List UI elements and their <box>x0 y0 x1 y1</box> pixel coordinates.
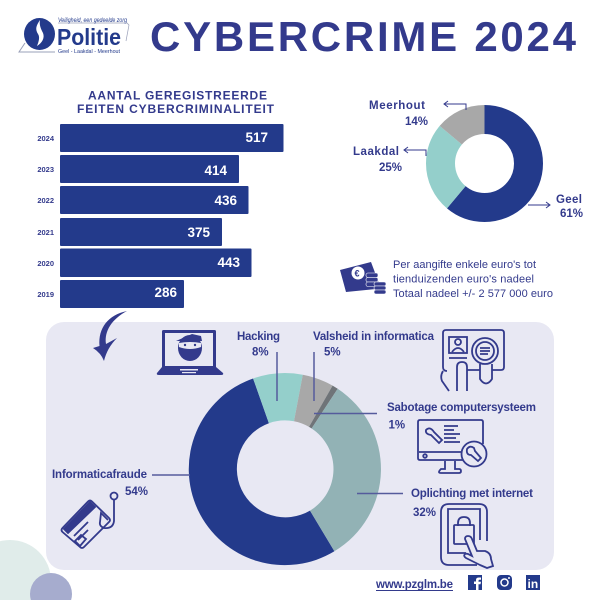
donut chart: municipalities <box>440 120 528 208</box>
icon: document inspection <box>441 330 504 391</box>
label: Laakdal <box>353 146 426 174</box>
bar chart: 443 <box>217 255 240 270</box>
text: damage: Totaal nadeel +/- 2 577 000 euro <box>393 288 553 300</box>
label: Oplichting: 32% <box>413 507 436 519</box>
bar chart: 2021 <box>37 228 54 237</box>
heading: bar chart <box>77 88 275 116</box>
arrow: curved down <box>93 311 127 361</box>
title: CYBERCRIME 2024 <box>150 13 577 60</box>
heading: bar chart: AANTAL GEREGISTREERDE <box>88 88 267 102</box>
label: Valsheid in informatica: 5% <box>324 346 341 358</box>
bar chart: 517 <box>245 130 268 145</box>
label: Laakdal: Laakdal <box>353 146 399 158</box>
heading: bar chart: FEITEN CYBERCRIMINALITEIT <box>77 102 275 116</box>
text: damage: tienduizenden euro's nadeel <box>393 274 534 286</box>
label: Geel <box>528 194 583 220</box>
label: Geel: Geel <box>556 194 582 206</box>
bar chart: 436 <box>214 193 237 208</box>
label: Informaticafraude: 54% <box>125 486 148 498</box>
icon: money and coins <box>340 262 386 294</box>
bar chart: 2023 <box>37 165 54 174</box>
label: Informaticafraude <box>52 469 190 498</box>
label: Hacking: Hacking <box>237 331 280 343</box>
icon: phished credit card <box>62 492 118 548</box>
bar chart: 2022 <box>37 196 54 205</box>
label: Meerhout: Meerhout <box>369 100 425 112</box>
label: Sabotage <box>314 402 536 432</box>
bar chart: 2020 <box>37 259 54 268</box>
label: Hacking: 8% <box>252 346 269 358</box>
bar chart: 2024 <box>37 134 55 143</box>
label: Sabotage: Sabotage computersysteem <box>387 402 536 414</box>
label: Valsheid in informatica: Valsheid in informatica <box>313 331 435 343</box>
text: damage: Per aangifte enkele euro's tot <box>393 259 536 271</box>
logo: Geel - Laakdal - Meerhout <box>58 49 120 55</box>
icon: computer repair <box>418 420 486 473</box>
bar chart: 375 <box>187 225 210 240</box>
bar chart: 286 <box>154 285 177 300</box>
label: Geel: 61% <box>560 208 583 220</box>
icon: tablet shopping <box>441 504 493 568</box>
label: Oplichting <box>357 488 533 519</box>
icon: money and coins: € <box>354 268 360 278</box>
label: Meerhout: 14% <box>405 116 428 128</box>
icon: instagram <box>497 575 512 590</box>
icon: hacker laptop <box>157 330 223 375</box>
label: Sabotage: 1% <box>388 420 405 432</box>
icon: facebook <box>468 575 482 590</box>
panel: crime types <box>46 322 554 570</box>
label: Meerhout <box>369 100 466 128</box>
logo <box>19 18 129 55</box>
label: Laakdal: 25% <box>379 162 402 174</box>
bar chart <box>37 124 284 308</box>
donut chart: crime types <box>189 373 381 565</box>
label: Oplichting: Oplichting met internet <box>411 488 533 500</box>
decorative circles <box>0 540 72 600</box>
bar chart: 2019 <box>37 290 54 299</box>
label: Hacking <box>237 331 280 401</box>
text: damage <box>393 259 553 300</box>
label: Valsheid in informatica <box>313 331 435 401</box>
icon: linkedin: in <box>528 577 538 591</box>
logo: Veiligheid, een gedeelde zorg <box>58 18 128 24</box>
logo: Politie <box>57 24 121 50</box>
website link: www.pzglm.be <box>375 579 453 591</box>
label: Informaticafraude: Informaticafraude <box>52 469 147 481</box>
icon: linkedin <box>526 575 540 591</box>
bar chart: 414 <box>204 163 227 178</box>
